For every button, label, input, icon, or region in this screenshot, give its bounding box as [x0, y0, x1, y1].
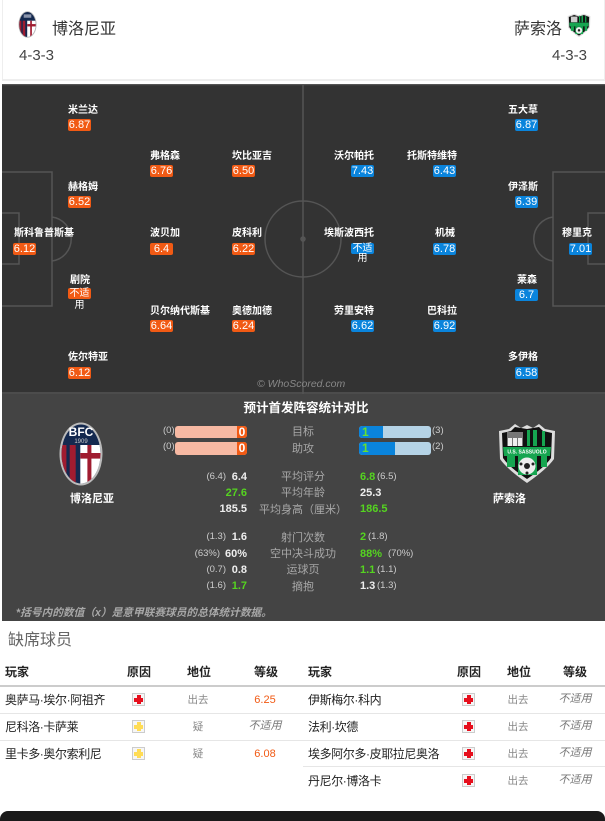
home player: 波贝加: 6.4	[154, 243, 169, 255]
assists row: 1	[362, 441, 369, 455]
home stat values: (1.6)	[206, 580, 226, 591]
away player: 巴科拉	[427, 304, 457, 332]
row: 埃多阿尔多·皮耶拉尼奥洛: 埃多阿尔多·皮耶拉尼奥洛	[308, 747, 439, 761]
away stat values: 1.1	[360, 564, 375, 576]
away player: 劳里安特	[334, 305, 374, 332]
table header: 原因	[127, 665, 151, 679]
home player: 赫格姆: 赫格姆	[68, 182, 98, 193]
row: 法利·坎德	[308, 720, 592, 734]
home player: 皮科利: 皮科利	[232, 228, 262, 239]
away player: 埃斯波西托: 埃斯波西托	[324, 228, 374, 239]
watermark: © WhoScored.com	[257, 378, 345, 390]
home stat values: 0.8	[232, 564, 247, 576]
row: 里卡多·奥尔索利尼	[5, 747, 276, 761]
table header: 地位	[187, 665, 211, 679]
away stat values: (70%)	[388, 548, 413, 559]
home stat values	[195, 471, 247, 592]
away crest label: 萨索洛	[493, 493, 526, 505]
section heading: missing players: 缺席球员	[8, 632, 72, 649]
home player: 贝尔纳代斯基: 6.64	[151, 320, 172, 332]
stat labels: 摘抱	[292, 581, 314, 593]
icon: Sassuolo small crest	[568, 14, 590, 37]
stats panel	[2, 394, 605, 621]
away player: 伊泽斯	[508, 181, 538, 208]
row: 里卡多·奥尔索利尼: 6.08	[254, 748, 276, 760]
stat labels: 目标	[292, 426, 314, 438]
home player: 佐尔特亚: 佐尔特亚	[68, 352, 108, 363]
away player: 莱森	[515, 274, 538, 301]
row: 里卡多·奥尔索利尼: 里卡多·奥尔索利尼	[5, 747, 101, 761]
home player: 斯科鲁普斯基	[13, 227, 74, 255]
pitch	[2, 84, 605, 394]
stat labels	[259, 426, 347, 593]
home stat values: (0.7)	[206, 564, 226, 575]
home player: 坎比亚吉: 6.50	[233, 165, 254, 177]
away player: 沃尔帕托: 7.43	[352, 165, 373, 177]
home player: 剧院	[68, 274, 91, 311]
row: 尼科洛·卡萨莱	[5, 720, 282, 734]
home stat values: 27.6	[226, 487, 247, 499]
pitch markings	[2, 84, 605, 394]
stat labels: 运球页	[286, 564, 320, 576]
away stat values: 6.8	[360, 471, 375, 483]
away player: 莱森: 6.7	[519, 289, 534, 301]
home player: 奥德加德: 6.24	[233, 320, 254, 332]
home stat values: 1.6	[232, 531, 247, 543]
away player: 莱森: 莱森	[517, 275, 537, 286]
away player: 劳里安特: 6.62	[352, 320, 373, 332]
icon: Bologna crest	[60, 422, 102, 486]
away player: 托斯特维特: 托斯特维特	[407, 151, 457, 162]
home player: 赫格姆: 6.52	[69, 196, 90, 208]
home stat values: 185.5	[219, 503, 247, 515]
home formation: 4-3-3	[19, 47, 54, 64]
home stat values: (6.4)	[206, 471, 226, 482]
row: 伊斯梅尔·科内: 不适用	[558, 693, 592, 705]
home player: 剧院: 用	[74, 300, 84, 311]
away player: 伊泽斯: 6.39	[516, 196, 537, 208]
away player: 机械	[433, 227, 456, 255]
home stat values: 60%	[225, 548, 247, 560]
home stat values: (63%)	[195, 548, 220, 559]
away player: 机械: 机械	[435, 228, 455, 239]
away team name: 萨索洛	[514, 21, 562, 38]
table header: 原因	[457, 665, 481, 679]
away player: 埃斯波西托	[324, 227, 374, 264]
header panel	[2, 0, 605, 81]
away player: 五大草	[508, 104, 538, 131]
home player: 斯科鲁普斯基: 斯科鲁普斯基	[14, 228, 74, 239]
away stat values: 1.3	[360, 580, 375, 592]
row: 里卡多·奥尔索利尼: 疑	[193, 748, 203, 760]
away player: 沃尔帕托: 沃尔帕托	[334, 151, 374, 162]
home player: 皮科利: 6.22	[233, 243, 254, 255]
away player: 机械: 6.78	[434, 243, 455, 255]
away stat values: 88%	[360, 548, 382, 560]
home player: 波贝加: 波贝加	[150, 228, 180, 239]
away stat values: (6.5)	[377, 471, 397, 482]
table header: 地位	[507, 665, 531, 679]
away player: 劳里安特: 劳里安特	[334, 306, 374, 317]
away player: 托斯特维特	[407, 150, 457, 177]
home stat values: 1.7	[232, 580, 247, 592]
goals row: (0)	[163, 425, 175, 436]
away stat values: 25.3	[360, 487, 381, 499]
away player: 巴科拉: 6.92	[434, 320, 455, 332]
away player: 五大草: 五大草	[508, 105, 538, 116]
away player: 托斯特维特: 6.43	[434, 165, 455, 177]
row: 伊斯梅尔·科内	[308, 692, 592, 707]
stat labels: 助攻	[292, 443, 314, 455]
row: 法利·坎德: 不适用	[558, 720, 592, 732]
row: 丹尼尔·博洛卡	[308, 774, 592, 788]
assists row	[163, 441, 444, 455]
away formation: 4-3-3	[552, 47, 587, 64]
footnote: *括号内的数值（x）是意甲联赛球员的总体统计数据。	[16, 607, 272, 619]
home player: 贝尔纳代斯基	[150, 305, 210, 332]
home player: 坎比亚吉	[232, 150, 272, 177]
icon: Sassuolo crest: U.S. SASSUOLO	[507, 450, 547, 456]
footer bar	[0, 811, 605, 821]
goals row: 0	[239, 425, 245, 439]
assists row: (2)	[432, 441, 444, 452]
row: 埃多阿尔多·皮耶拉尼奥洛: 出去	[508, 748, 528, 760]
away player: 巴科拉: 巴科拉	[427, 306, 457, 317]
home player: 弗格森	[150, 150, 180, 177]
icon: Bologna crest: 1909	[74, 439, 88, 445]
home player: 皮科利	[232, 227, 262, 255]
row: 尼科洛·卡萨莱: 尼科洛·卡萨莱	[5, 720, 78, 734]
home team name: 博洛尼亚	[52, 21, 116, 38]
goals row: 1	[362, 425, 369, 439]
away player: 穆里克: 7.01	[570, 243, 591, 255]
away stat values: (1.3)	[377, 580, 397, 591]
assists row: (0)	[163, 441, 175, 452]
away stat values: (1.8)	[368, 531, 388, 542]
away stat values	[360, 471, 413, 592]
stat labels: 平均身高（厘米）	[259, 504, 347, 516]
row: 伊斯梅尔·科内: 出去	[508, 694, 528, 706]
home player: 米兰达	[68, 104, 98, 131]
row: 法利·坎德: 法利·坎德	[308, 720, 358, 734]
icon: Bologna small crest	[18, 11, 36, 38]
row: 尼科洛·卡萨莱: 疑	[193, 721, 203, 733]
away player: 多伊格: 6.58	[516, 367, 537, 379]
home player: 佐尔特亚	[68, 351, 108, 379]
home stat values: (1.3)	[206, 531, 226, 542]
row: 丹尼尔·博洛卡: 不适用	[558, 774, 592, 786]
table header: 玩家	[308, 665, 332, 679]
row: 奥萨马·埃尔·阿祖齐: 6.25	[254, 694, 276, 706]
stat labels: 射门次数	[281, 532, 325, 544]
table header: 等级	[254, 665, 278, 679]
row: 埃多阿尔多·皮耶拉尼奥洛	[308, 746, 592, 761]
home player: 剧院: 剧院	[70, 275, 90, 286]
row: 尼科洛·卡萨莱: 不适用	[248, 720, 282, 732]
stat labels: 平均年龄	[281, 487, 325, 499]
home player: 贝尔纳代斯基: 贝尔纳代斯基	[150, 306, 210, 317]
away stat values: (1.1)	[377, 564, 397, 575]
home player: 坎比亚吉: 坎比亚吉	[232, 151, 272, 162]
home player: 米兰达: 米兰达	[68, 105, 98, 116]
row: 法利·坎德: 出去	[508, 721, 528, 733]
away stat values: 2	[360, 531, 366, 543]
away stat values: 186.5	[360, 503, 388, 515]
away player: 沃尔帕托	[334, 150, 374, 177]
row: 埃多阿尔多·皮耶拉尼奥洛: 不适用	[558, 747, 592, 759]
home player: 奥德加德: 奥德加德	[232, 306, 272, 317]
icon: Sassuolo crest	[499, 424, 555, 483]
goals row	[163, 425, 444, 439]
away player: 多伊格	[508, 351, 538, 379]
home stat values: 6.4	[232, 471, 247, 483]
home player: 米兰达: 6.87	[69, 119, 90, 131]
home player: 弗格森: 弗格森	[150, 151, 180, 162]
row: 奥萨马·埃尔·阿祖齐: 出去	[188, 694, 208, 706]
stats title: 预计首发阵容统计对比	[243, 401, 368, 415]
away player: 五大草: 6.87	[516, 119, 537, 131]
home player: 波贝加	[150, 227, 180, 255]
home player: 赫格姆	[68, 181, 98, 208]
home player: 弗格森: 6.76	[151, 165, 172, 177]
icon: Bologna crest: BFC	[69, 425, 94, 439]
home player: 斯科鲁普斯基: 6.12	[14, 243, 35, 255]
home player: 奥德加德	[232, 305, 272, 332]
row: 奥萨马·埃尔·阿祖齐: 奥萨马·埃尔·阿祖齐	[5, 693, 105, 707]
away player: 伊泽斯: 伊泽斯	[508, 182, 538, 193]
stat labels: 空中决斗成功	[270, 548, 336, 560]
assists row: 0	[239, 441, 245, 455]
row: 丹尼尔·博洛卡: 丹尼尔·博洛卡	[308, 774, 381, 788]
away player: 多伊格: 多伊格	[508, 352, 538, 363]
away player: 埃斯波西托: 用	[358, 253, 368, 264]
away player: 穆里克	[562, 227, 592, 255]
table header: 等级	[563, 665, 587, 679]
home player: 佐尔特亚: 6.12	[69, 367, 90, 379]
stat labels: 平均评分	[281, 471, 325, 483]
goals row: (3)	[432, 425, 444, 436]
row: 奥萨马·埃尔·阿祖齐	[5, 693, 276, 707]
row: 伊斯梅尔·科内: 伊斯梅尔·科内	[308, 693, 381, 707]
table header: 玩家	[5, 665, 29, 679]
table header	[0, 665, 605, 687]
away player: 埃斯波西托: 不适	[352, 243, 372, 254]
row: 丹尼尔·博洛卡: 出去	[508, 775, 528, 787]
home player: 剧院: 不适	[70, 288, 90, 299]
home crest label: 博洛尼亚	[70, 493, 114, 505]
away player: 穆里克: 穆里克	[562, 228, 592, 239]
